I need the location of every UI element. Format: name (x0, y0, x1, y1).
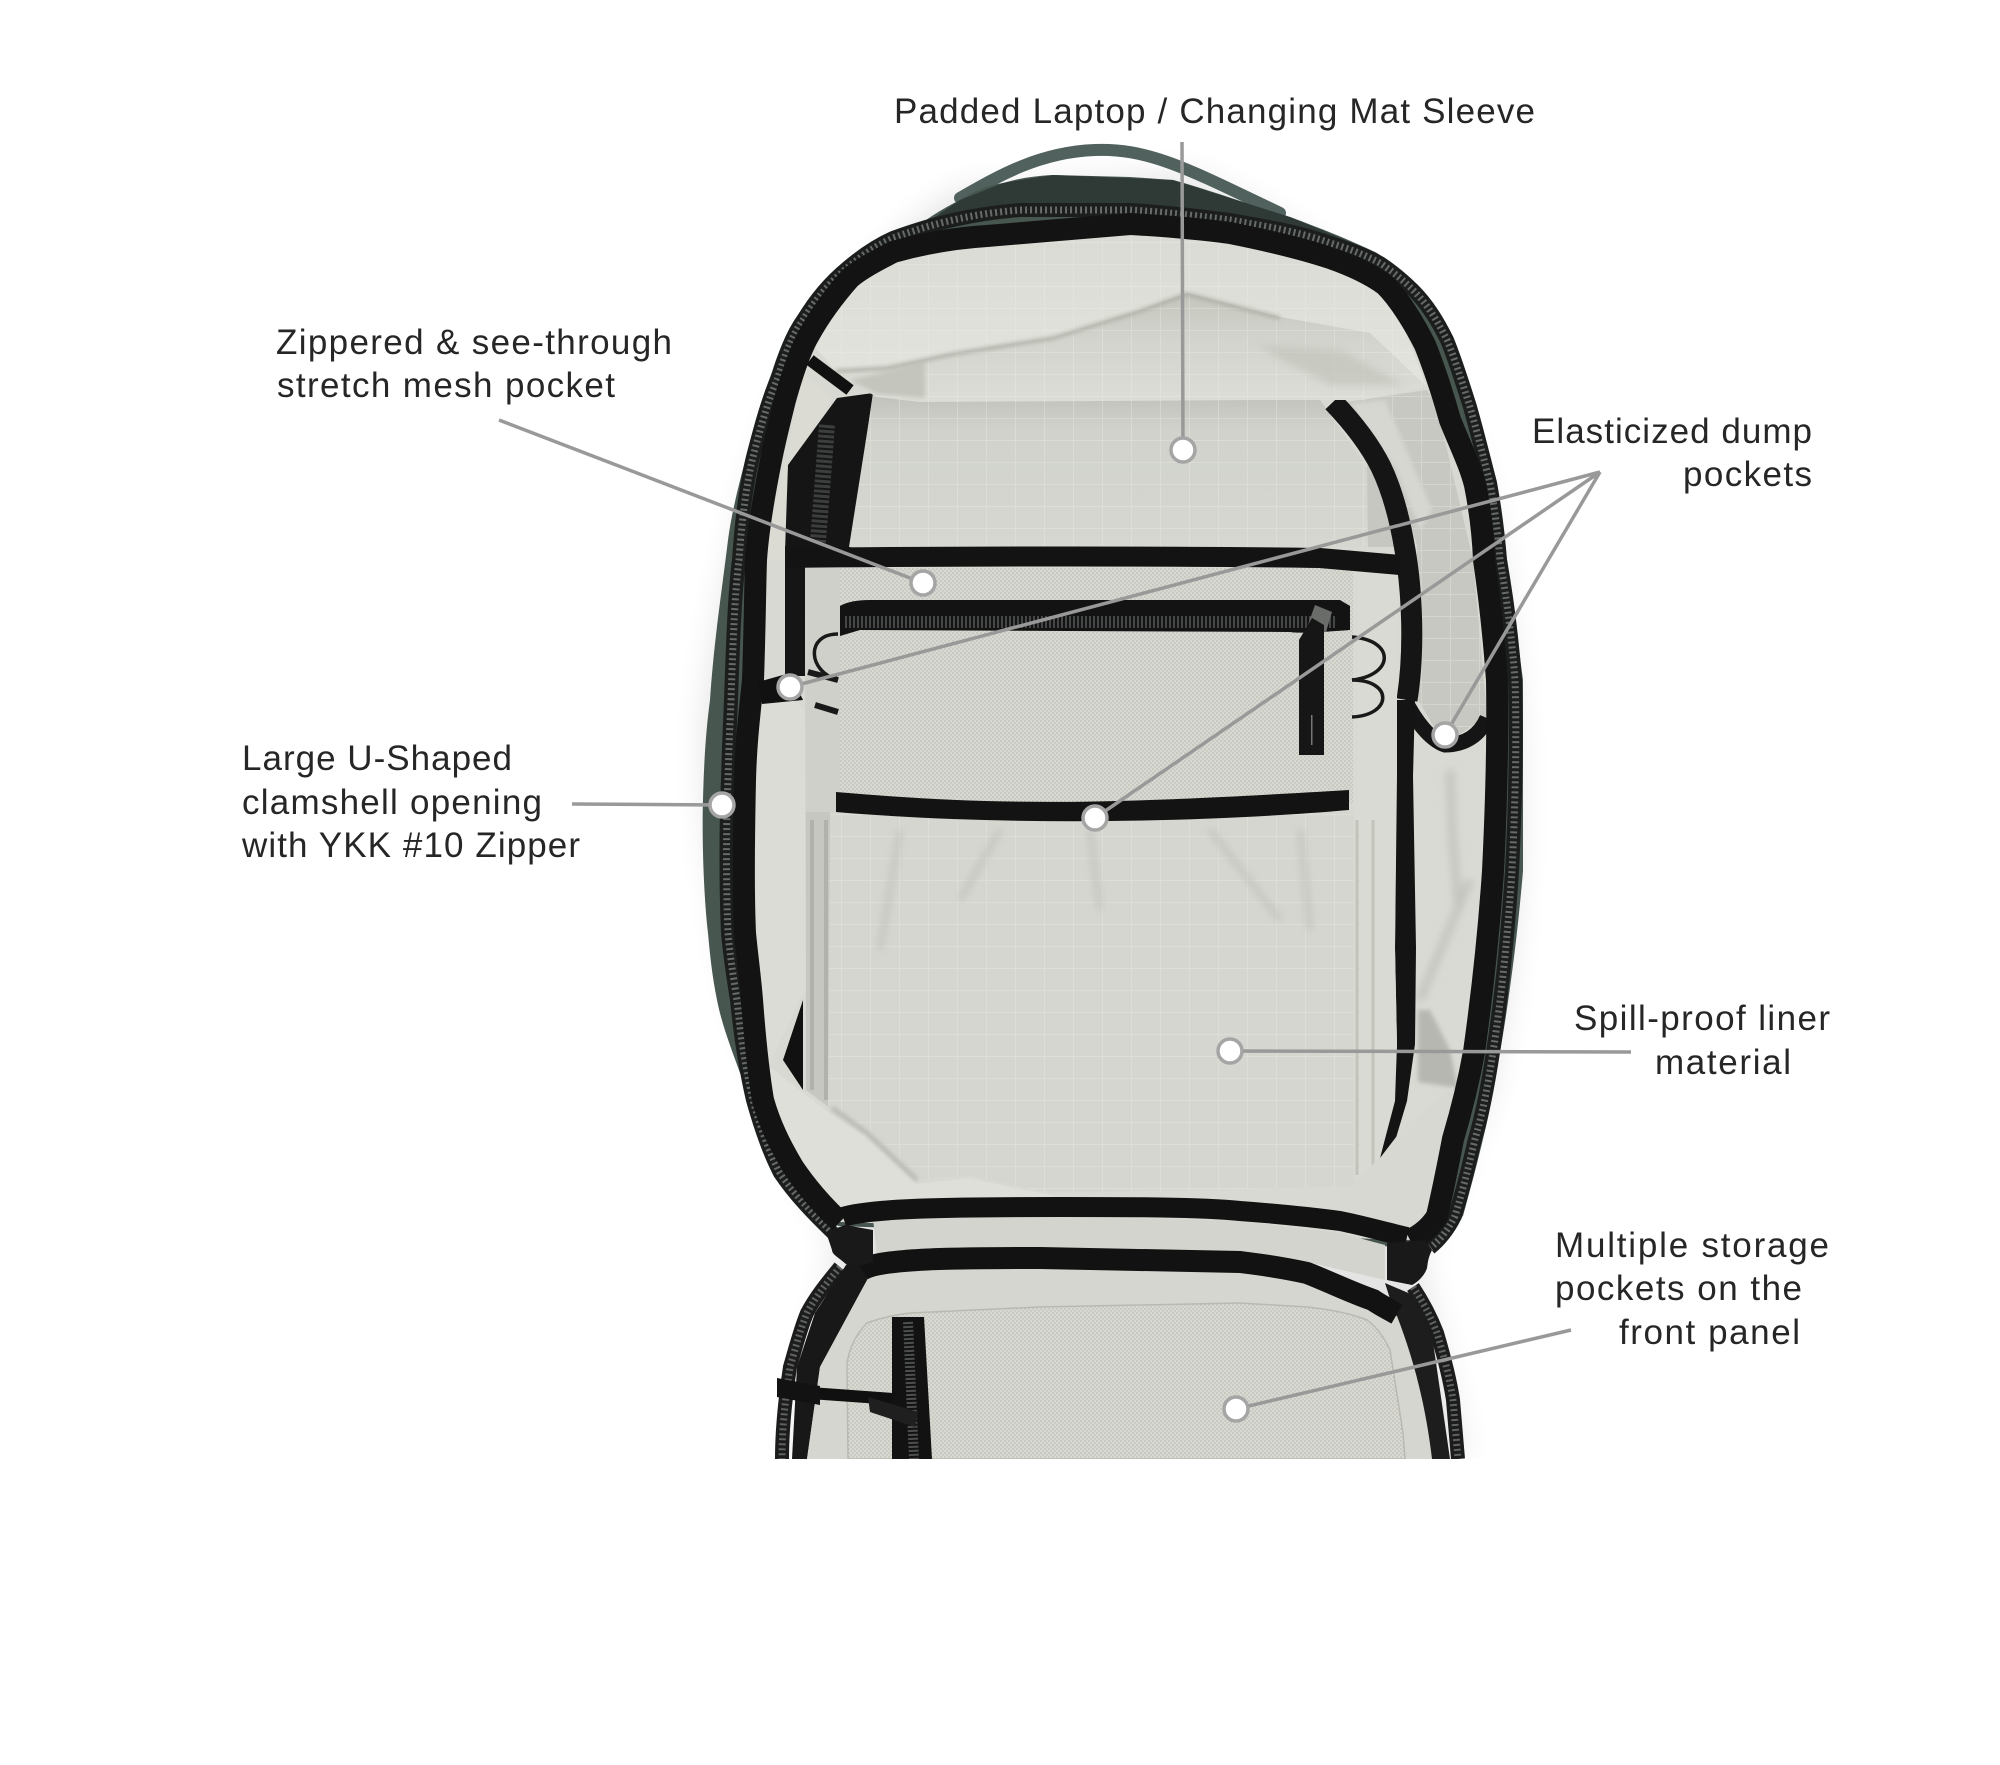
interior liner base (744, 224, 1497, 1240)
callout: padded laptop sleeve (894, 92, 1535, 462)
main lower liner pocket (828, 852, 830, 1108)
front panel mesh (847, 1303, 1405, 1459)
front panel liner (807, 1258, 1432, 1459)
flap bottom shadow edge (877, 402, 1320, 406)
left vertical binding (785, 546, 805, 676)
marker dot: left pocket (778, 675, 802, 699)
label: Large U-Shaped clamshell opening with YKK #10 Zipper: clamshell opening (242, 783, 542, 822)
callout: spill-proof liner (1218, 999, 1830, 1082)
left lower dark gap (783, 1000, 803, 1090)
callout: zippered mesh pocket (276, 323, 935, 595)
zipper pull tab (1299, 618, 1324, 755)
left pale liner strip (768, 373, 833, 560)
hinge strip (873, 1217, 1385, 1280)
zipper pull (1306, 605, 1332, 632)
right lower gusset (1372, 1086, 1453, 1170)
marker dot (1224, 1397, 1248, 1421)
right lower pocket (1403, 710, 1487, 1128)
mesh upper pocket (840, 568, 1353, 803)
label: Zippered & see-through stretch mesh pocket: Zippered & see-through (276, 323, 672, 362)
marker dot (710, 793, 734, 817)
flap lower layer (870, 293, 1366, 402)
label: Large U-Shaped clamshell opening with YKK #10 Zipper: Large U-Shaped (242, 739, 512, 778)
callout: U-shaped clamshell opening (241, 739, 734, 865)
label: Elasticized dump pockets: pockets (1683, 455, 1812, 494)
hinge knob right (1387, 1240, 1432, 1285)
lower panel dark backing left (792, 1262, 877, 1459)
label: Spill-proof liner material: Spill-proof liner (1574, 999, 1830, 1038)
bottom binding of main compartment (843, 1207, 1407, 1237)
marker dot (911, 571, 935, 595)
flap left wedge shadow (850, 362, 925, 398)
leader line (1230, 1051, 1631, 1052)
lower panel dark backing right (1385, 1283, 1450, 1459)
flap upper layer (816, 338, 1426, 386)
label: Large U-Shaped clamshell opening with YKK #10 Zipper: with YKK #10 Zipper (241, 826, 580, 865)
D-ring loops (808, 634, 1384, 717)
soft drop shadow behind the bag (704, 174, 1520, 1459)
left seam strip (805, 568, 840, 918)
flap corner strap (810, 360, 850, 390)
hinge lower binding (862, 1258, 1397, 1314)
mesh pocket zipper (840, 600, 1350, 755)
top carry handle (960, 150, 1280, 213)
right pale side strip (1380, 696, 1397, 1158)
cutoff mask below photo (0, 1459, 2000, 1765)
label: Padded Laptop / Changing Mat Sleeve: Padded Laptop / Changing Mat Sleeve (894, 92, 1535, 131)
label: Zippered & see-through stretch mesh pocket: stretch mesh pocket (277, 366, 615, 405)
padded sleeve panel (849, 395, 1368, 547)
label: Multiple storage pockets on the front panel: front panel (1619, 1313, 1800, 1352)
right curved binding (1333, 402, 1412, 700)
outer teal shell (703, 175, 1523, 1248)
dark top shell shading (913, 175, 1377, 253)
left dump pocket (755, 700, 807, 1067)
marker dot (1218, 1039, 1242, 1063)
left dark compartment with zipper (785, 393, 873, 552)
lower panel zipper (782, 1267, 1458, 1459)
wrinkle shading on lower pocket (880, 830, 1310, 950)
top folded flap (815, 230, 1427, 404)
lower left gusset (770, 1067, 1060, 1213)
right elastic opening (1405, 700, 1487, 745)
inner black binding band (744, 224, 1497, 1240)
right upper pocket liner (1347, 390, 1487, 745)
right pocket dark fold (1418, 1010, 1458, 1088)
lower mesh pocket zipper (836, 790, 1349, 821)
flap right wedge shadow (1268, 345, 1395, 386)
three leader lines (790, 472, 1600, 818)
photo: open backpack interior (703, 150, 1523, 1459)
leader line (1182, 142, 1183, 450)
callout: elasticized dump pockets (778, 412, 1812, 830)
side strap with buckle (777, 1378, 918, 1427)
horizontal binding above mesh pocket (786, 556, 1400, 565)
right pocket creases (1420, 770, 1470, 1000)
flap fold line (835, 294, 1280, 371)
left pocket elastic (758, 673, 803, 704)
label: Elasticized dump pockets: Elasticized dump (1532, 412, 1812, 451)
right pocket light fold (1350, 400, 1432, 530)
leader line (1236, 1330, 1571, 1409)
interior components (755, 230, 1487, 1232)
marker dot: centre pocket (1083, 806, 1107, 830)
front panel vertical zipper (892, 1317, 932, 1459)
label: Multiple storage pockets on the front panel: Multiple storage (1555, 1226, 1829, 1265)
gap between sleeve and right binding (1367, 465, 1394, 547)
right vertical binding (1380, 700, 1416, 1158)
leader line (572, 804, 722, 805)
label: Spill-proof liner material: material (1655, 1043, 1791, 1082)
callout: front panel pockets (1224, 1226, 1829, 1421)
marker dot: right pocket (1433, 723, 1457, 747)
clamshell zipper track (726, 210, 1516, 1248)
leader line (499, 420, 923, 583)
hinge knob left (826, 1225, 873, 1267)
label: Multiple storage pockets on the front panel: pockets on the (1555, 1269, 1802, 1308)
marker dot (1171, 438, 1195, 462)
